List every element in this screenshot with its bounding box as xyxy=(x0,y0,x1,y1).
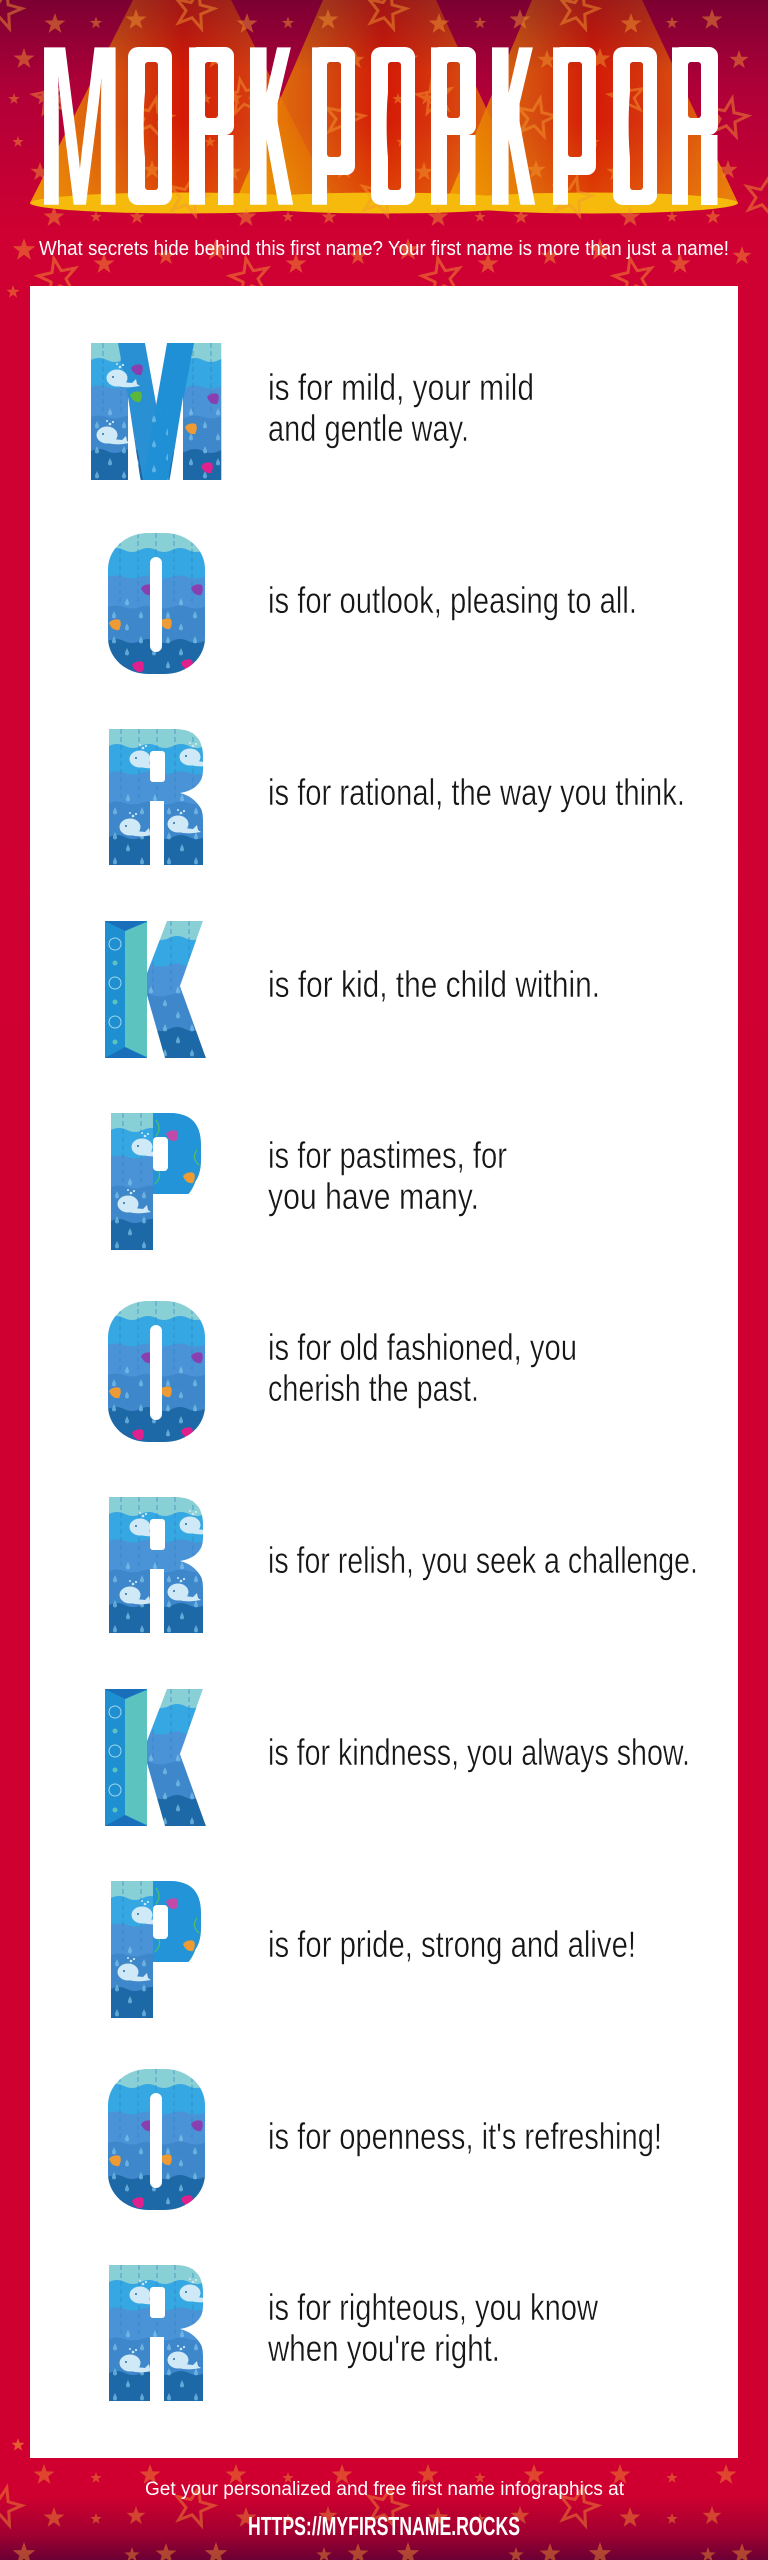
text: O second line xyxy=(268,1327,577,1409)
panel: white content card xyxy=(30,286,738,2458)
text: O second line: cherish the past. xyxy=(268,1368,479,1409)
text: P line: is for pastimes, for xyxy=(268,1135,507,1176)
subtitle: What secrets hide behind this first name? Your first name is more than just a name! xyxy=(39,238,729,260)
text: P line xyxy=(268,1135,507,1217)
letter icon: R third xyxy=(109,2265,203,2401)
text: R third line: when you're right. xyxy=(267,2328,500,2369)
letter icon: P xyxy=(111,1113,201,1250)
text: M line xyxy=(268,367,534,449)
star pattern top xyxy=(0,0,768,298)
letter icon: O second xyxy=(108,1301,205,1442)
star pattern bottom xyxy=(0,2438,752,2560)
letter icon: O third xyxy=(108,2069,205,2210)
text: M line: and gentle way. xyxy=(268,408,469,449)
text: R third line xyxy=(267,2287,598,2369)
text: O line: is for outlook, pleasing to all. xyxy=(268,580,637,621)
text: R third line: is for righteous, you know xyxy=(268,2287,598,2328)
text: P line: you have many. xyxy=(268,1176,479,1217)
text: O third line: is for openness, it's refreshing! xyxy=(268,2116,662,2157)
text: P second line: is for pride, strong and alive! xyxy=(268,1924,636,1965)
text: M line: is for mild, your mild xyxy=(268,367,534,408)
letter icon: O xyxy=(108,533,205,674)
letter icon: R xyxy=(109,729,203,865)
letter icon: P second xyxy=(111,1881,201,2018)
title xyxy=(44,47,718,205)
letter icon: M xyxy=(91,343,222,480)
letter icon: K second xyxy=(105,1689,206,1826)
text: O second line: is for old fashioned, you xyxy=(268,1327,577,1368)
text: K line: is for kid, the child within. xyxy=(268,964,600,1005)
footer text: Get your personalized and free first name infographics at xyxy=(145,2479,625,2500)
footer url: HTTPS://MYFIRSTNAME.ROCKS xyxy=(248,2511,520,2541)
letter icon: R second xyxy=(109,1497,203,1633)
letter icon: K xyxy=(105,921,206,1058)
spotlights xyxy=(30,0,738,214)
